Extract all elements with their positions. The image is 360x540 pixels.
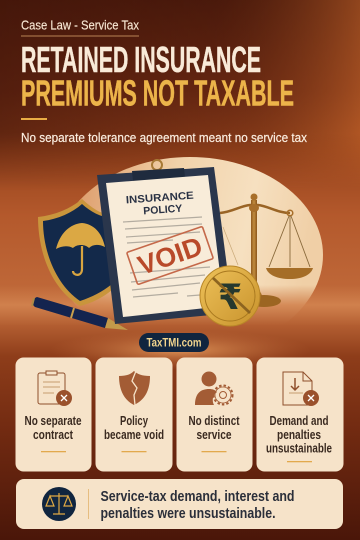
card label: unsustainable xyxy=(266,442,332,456)
icon: crossed rupee coin xyxy=(200,266,260,326)
clipboard xyxy=(97,160,233,324)
card label: service xyxy=(196,428,232,442)
cream backdrop xyxy=(73,157,323,312)
icon: shield with umbrella xyxy=(38,199,112,306)
card label xyxy=(24,414,82,442)
policy paper xyxy=(106,175,224,317)
icon: scales badge xyxy=(42,487,76,521)
header xyxy=(21,18,307,145)
icon: pen xyxy=(32,297,128,330)
icon: cracked shield xyxy=(119,371,150,405)
card: demand and penalties unsustainable xyxy=(256,358,344,472)
conclusion text xyxy=(100,488,294,522)
badge: TaxTMI.com: TaxTMI.com xyxy=(146,338,202,350)
paper lines xyxy=(123,217,210,297)
title xyxy=(21,39,294,114)
icon: person with gear xyxy=(195,372,232,405)
badge: TaxTMI.com xyxy=(139,333,209,352)
paper heading: INSURANCE xyxy=(125,190,194,206)
card label: became void xyxy=(104,428,164,442)
card label xyxy=(104,414,164,442)
card: policy became void xyxy=(96,358,172,472)
icon: document with cross xyxy=(283,372,319,406)
icon: clipboard with cross xyxy=(38,371,72,406)
card label: No distinct xyxy=(188,414,240,428)
illustration xyxy=(0,157,360,353)
conclusion banner xyxy=(16,479,343,529)
subtitle: No separate tolerance agreement meant no service tax xyxy=(21,130,307,145)
category label: Case Law - Service Tax xyxy=(21,18,140,32)
clipboard clip xyxy=(132,160,185,181)
paper heading: POLICY xyxy=(143,203,183,217)
card label: Policy xyxy=(120,414,148,428)
card label: Demand and xyxy=(270,414,328,428)
card: no separate contract xyxy=(16,358,92,472)
icon: umbrella xyxy=(56,223,105,275)
conclusion text: penalties were unsustainable. xyxy=(100,505,276,522)
card label: No separate xyxy=(24,414,82,428)
icon: crossed rupee coin: ₹ xyxy=(218,278,242,318)
icon: balance scale xyxy=(220,194,313,307)
card label: penalties xyxy=(277,428,321,442)
card: no distinct service xyxy=(176,358,252,472)
card label xyxy=(266,414,332,456)
card label xyxy=(188,414,240,442)
conclusion text: Service-tax demand, interest and xyxy=(100,488,294,505)
card label: contract xyxy=(33,428,74,442)
void stamp: VOID xyxy=(134,231,206,281)
paper heading xyxy=(125,190,194,217)
